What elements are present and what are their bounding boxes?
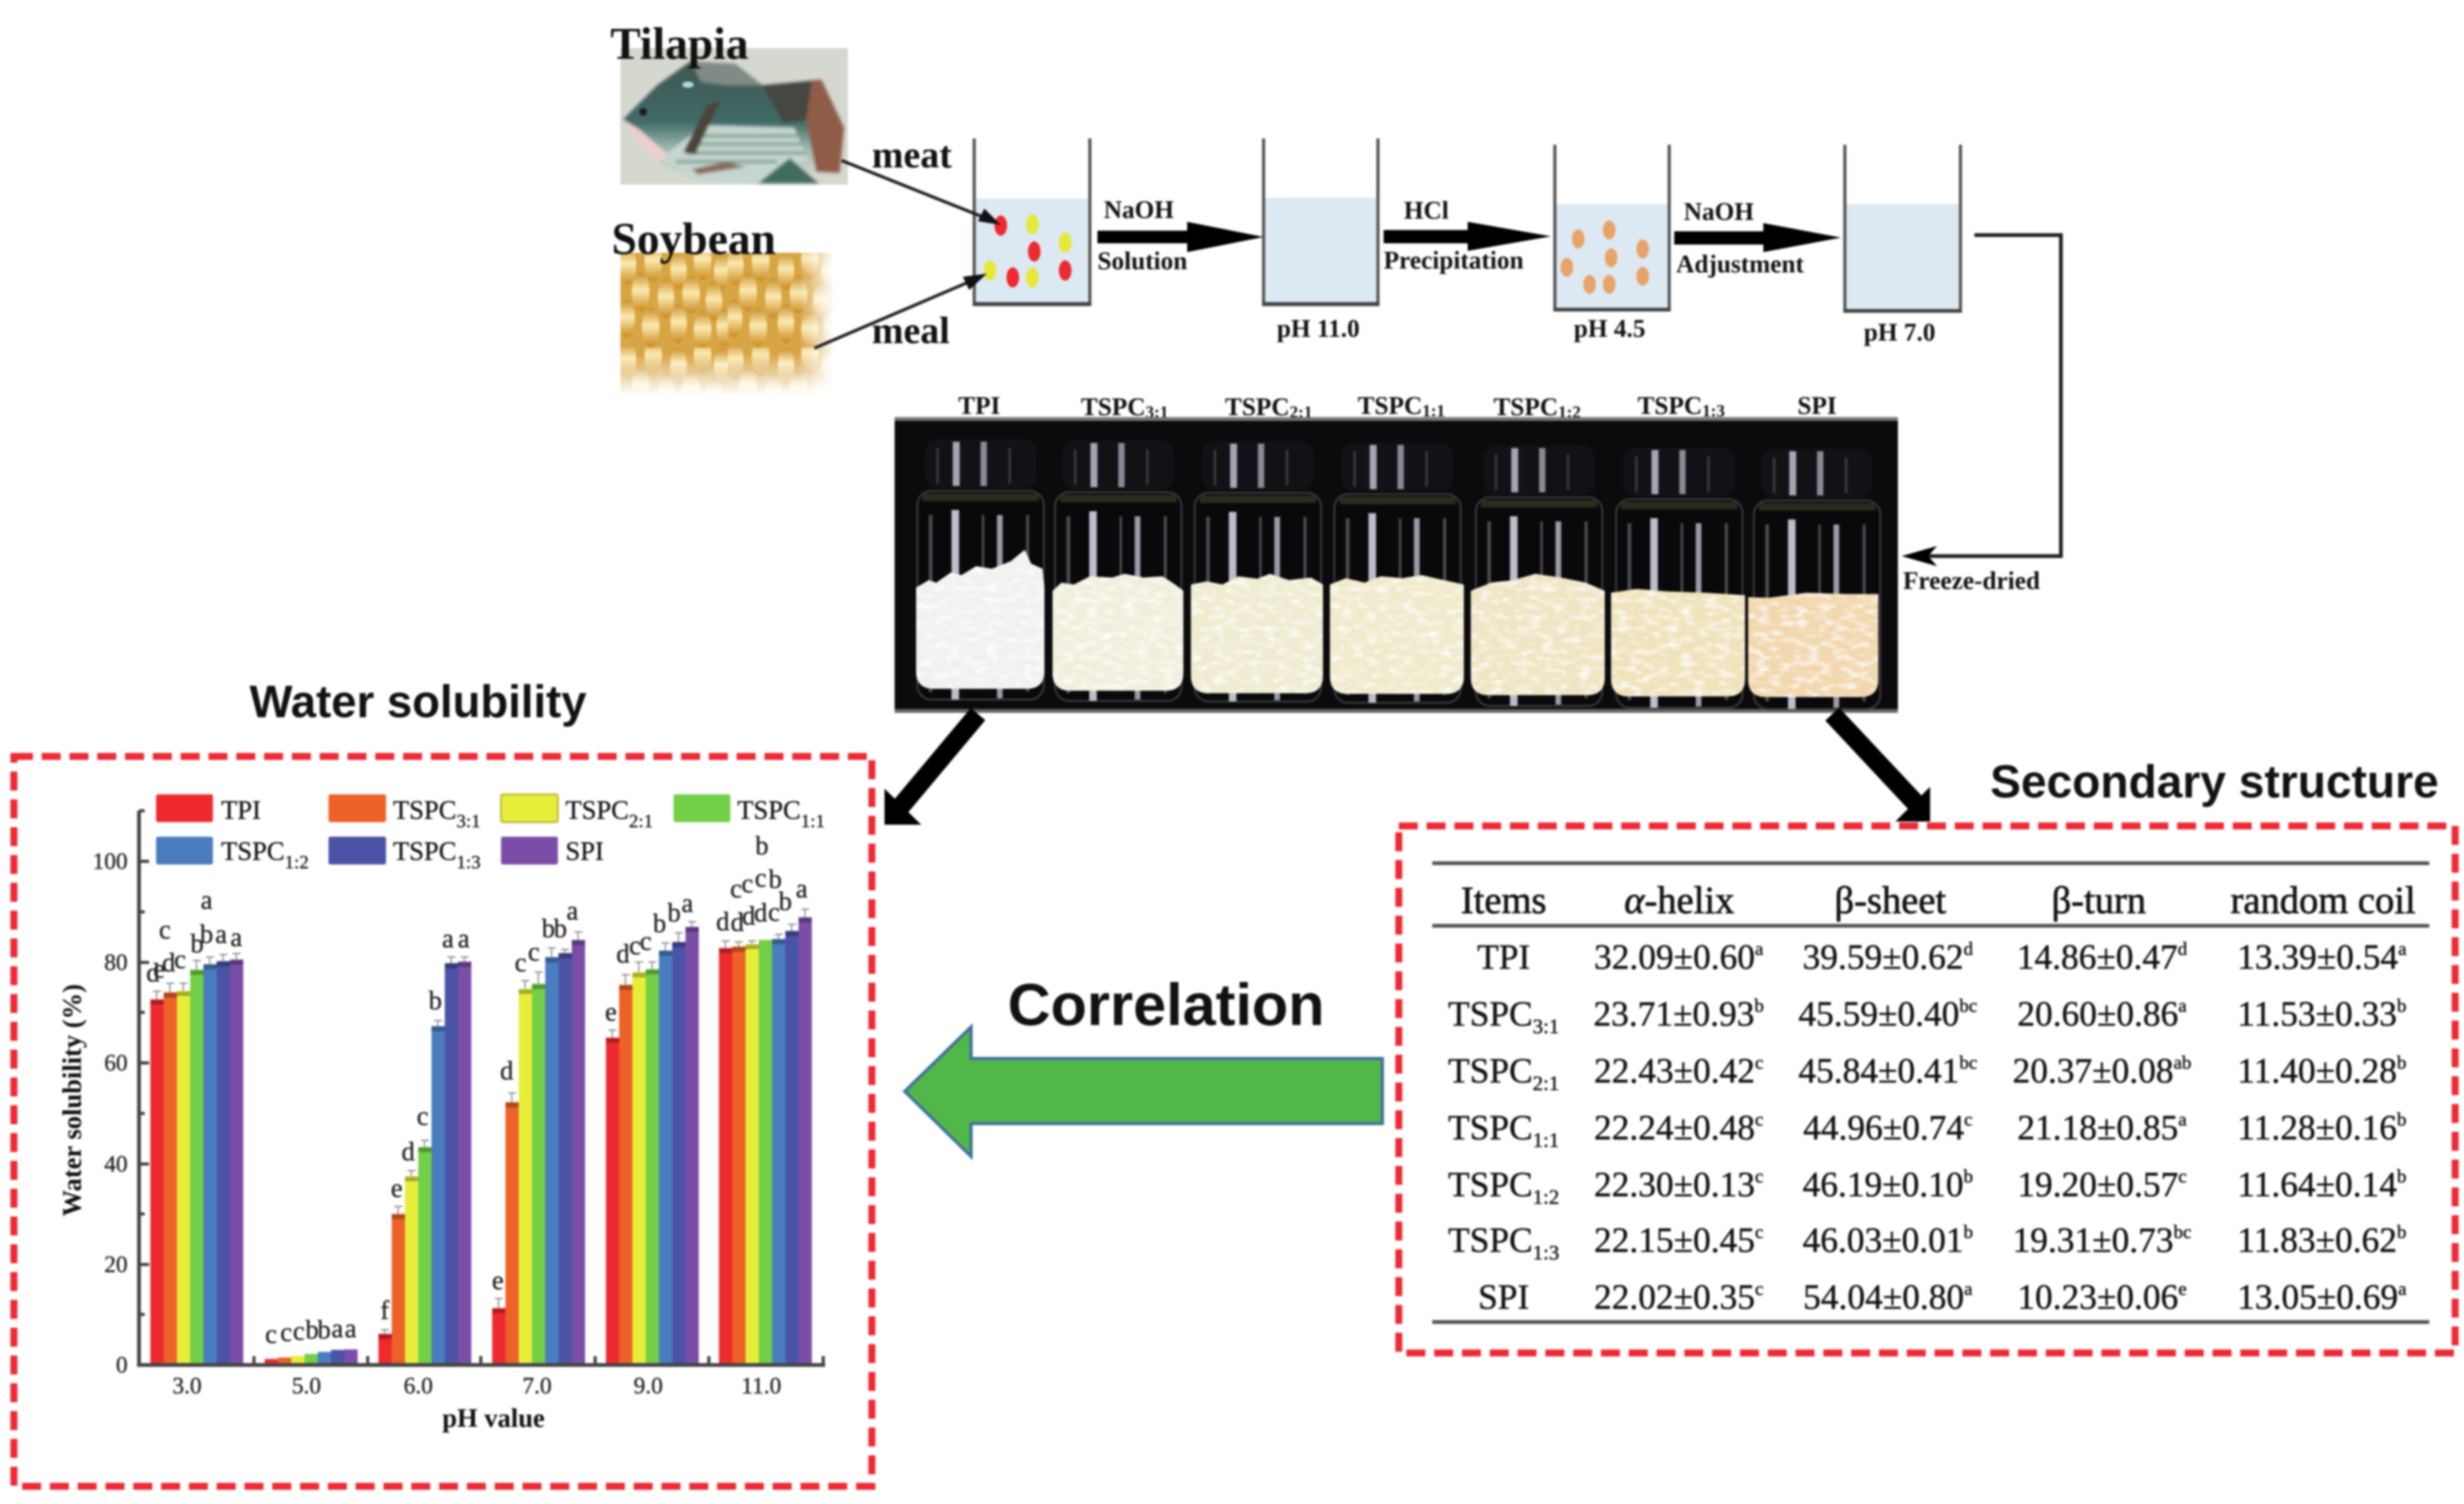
significance letters: c (755, 864, 766, 893)
x axis tick labels: 5.0 (292, 1373, 321, 1399)
table row: SPI: c (1755, 1278, 1763, 1299)
step: NaOH solution arrow: Solution (1097, 246, 1187, 275)
significance letters: b (200, 920, 214, 949)
chart legend: SPI (565, 837, 604, 866)
arrow: meat to beaker (842, 161, 1001, 225)
table row: TSPC 1:3: c (1755, 1222, 1763, 1242)
table row: SPI: 13.05±0.69 (2237, 1278, 2398, 1317)
step: NaOH solution arrow: NaOH (1104, 195, 1174, 224)
table header: β-turn (2051, 880, 2146, 922)
significance letters: a (231, 923, 243, 952)
significance letters: a (682, 889, 694, 918)
step: NaOH solution arrow (1097, 195, 1264, 275)
significance letters: b (542, 914, 555, 943)
beaker 1 with mixture (973, 138, 1091, 306)
x axis tick labels: 6.0 (404, 1373, 433, 1399)
table row: TSPC 1:3: bc (2173, 1222, 2192, 1242)
significance letters: a (442, 925, 454, 954)
significance letters: d (742, 902, 756, 931)
significance letters: b (553, 914, 567, 943)
sample labels above photo: TSPC (1358, 391, 1422, 420)
x axis tick labels: 7.0 (522, 1373, 552, 1399)
significance letters: a (332, 1314, 344, 1343)
table row: TSPC 2:1: c (1755, 1052, 1763, 1073)
chart legend: TSPC (393, 837, 456, 866)
significance letters: b (667, 899, 681, 928)
arrow: photo to secondary structure (1832, 714, 1930, 822)
table row: TSPC 3:1: TSPC (1448, 995, 1533, 1034)
significance letters: a (201, 886, 213, 915)
table row: TPI: d (2178, 938, 2187, 959)
significance letters: b (306, 1316, 318, 1345)
table row: TSPC 1:1: b (2397, 1109, 2407, 1130)
table row: TSPC 1:1 (1448, 1108, 2407, 1152)
table row: TSPC 1:2: 46.19±0.10 (1803, 1165, 1964, 1204)
significance letters: c (515, 949, 526, 978)
table header (1461, 880, 2416, 922)
heading: Tilapia: Tilapia (610, 18, 749, 69)
table row: TSPC 1:2: b (2397, 1166, 2407, 1187)
sample labels above photo: 2:1 (1289, 403, 1312, 421)
image: tilapia fish (620, 48, 848, 185)
table row: TSPC 1:2: 22.30±0.13 (1594, 1165, 1755, 1204)
beaker 2 pH 11.0 (1262, 138, 1379, 343)
table row: TSPC 2:1: TSPC (1448, 1052, 1533, 1091)
significance letters: d (730, 908, 744, 937)
table row: TSPC 3:1: 3:1 (1533, 1016, 1559, 1038)
table row: TSPC 3:1: b (2397, 995, 2407, 1016)
label: meat: meat (872, 134, 952, 176)
x axis tick labels: 9.0 (634, 1373, 663, 1399)
table header: α-helix (1624, 880, 1734, 922)
table row: TSPC 3:1: bc (1959, 995, 1978, 1016)
chart legend (156, 794, 825, 873)
table row: TSPC 2:1: 20.37±0.08 (2012, 1052, 2173, 1091)
table row: TSPC 3:1: 45.59±0.40 (1798, 995, 1959, 1034)
table row: TPI: TPI (1477, 938, 1530, 977)
table row: SPI: a (2398, 1278, 2407, 1299)
significance letters: d (500, 1057, 513, 1086)
significance letters (147, 832, 808, 1349)
beaker 3 pH 4.5 (1554, 145, 1670, 343)
x axis tick labels: 3.0 (172, 1373, 202, 1399)
table row: TSPC 3:1 (1448, 995, 2407, 1038)
significance letters: c (293, 1317, 305, 1346)
significance letters: d (617, 940, 629, 969)
table row: TSPC 1:1: 21.18±0.85 (2017, 1108, 2178, 1148)
chart legend: 1:1 (800, 811, 825, 832)
table row: SPI: a (1964, 1278, 1972, 1299)
table row: TSPC 2:1: 2:1 (1533, 1072, 1559, 1095)
significance letters: c (730, 875, 742, 904)
table row: TPI: 32.09±0.60 (1594, 938, 1755, 977)
table row: TSPC 2:1: ab (2173, 1052, 2192, 1073)
table row: TSPC 2:1: 45.84±0.41 (1798, 1052, 1959, 1091)
table row: TSPC 1:1: c (1964, 1109, 1972, 1130)
significance letters: a (345, 1314, 357, 1343)
significance letters: e (154, 955, 165, 984)
chart axes (139, 811, 825, 1365)
table row: TSPC 1:3: 1:3 (1533, 1242, 1559, 1264)
y axis tick labels: 20 (104, 1252, 128, 1278)
table row: TSPC 1:1: 22.24±0.48 (1594, 1108, 1755, 1148)
step: HCl precipitation arrow: Precipitation (1384, 246, 1523, 274)
image: soybeans (620, 253, 834, 396)
table header: random coil (2230, 880, 2416, 922)
significance letters: b (317, 1316, 331, 1345)
y axis tick labels: 80 (104, 950, 128, 976)
table row: TSPC 1:2: c (1755, 1166, 1763, 1187)
table row: TSPC 1:3: 22.15±0.45 (1594, 1221, 1755, 1260)
y axis tick labels: 60 (104, 1050, 128, 1076)
table row: TSPC 1:2: TSPC (1448, 1165, 1533, 1204)
arrow: meal to beaker (814, 274, 987, 348)
heading: Secondary structure: Secondary structure (1990, 756, 2439, 808)
significance letters: c (159, 916, 171, 945)
significance letters: b (653, 909, 666, 938)
chart legend: TSPC (221, 837, 284, 866)
table row: TSPC 2:1: 11.40±0.28 (2237, 1052, 2397, 1091)
arrow: freeze-dried connector (1902, 235, 2061, 566)
significance letters: d (147, 959, 159, 988)
beaker 2 pH 11.0: pH 11.0 (1277, 314, 1360, 343)
table row: TSPC 3:1: 20.60±0.86 (2017, 995, 2178, 1034)
significance letters: b (191, 930, 203, 959)
table row: TSPC 1:2: 1:2 (1533, 1186, 1559, 1209)
significance letters: a (567, 897, 579, 926)
table row: TSPC 1:1: 11.28±0.16 (2237, 1108, 2397, 1148)
table row: TSPC 2:1: b (2397, 1052, 2407, 1073)
table row: TSPC 3:1: 11.53±0.33 (2237, 995, 2397, 1034)
table row: SPI: SPI (1478, 1278, 1529, 1317)
table row: TSPC 3:1: b (1754, 995, 1764, 1016)
y axis tick labels: 40 (104, 1151, 128, 1177)
table row: TSPC 1:1: c (1755, 1109, 1763, 1130)
table row: TSPC 1:3: 19.31±0.73 (2012, 1221, 2173, 1260)
significance letters: c (174, 945, 186, 974)
table row: TPI: 39.59±0.62 (1803, 938, 1964, 977)
table row: TSPC 1:2: 19.20±0.57 (2017, 1165, 2178, 1204)
significance letters: d (754, 899, 767, 928)
table row: TSPC 1:3: b (2397, 1222, 2407, 1242)
y axis tick labels: 0 (116, 1352, 128, 1378)
significance letters: c (640, 927, 651, 956)
sample labels above photo: 1:2 (1558, 403, 1581, 421)
y axis tick labels: 100 (92, 849, 128, 875)
beaker 4 pH 7.0: pH 7.0 (1864, 318, 1935, 346)
sample labels above photo: 1:1 (1422, 401, 1445, 420)
table row: TSPC 1:1: 44.96±0.74 (1803, 1108, 1964, 1148)
step: HCl precipitation arrow: HCl (1404, 196, 1449, 224)
table row: TSPC 1:3: TSPC (1448, 1221, 1533, 1260)
table row: TSPC 1:2 (1448, 1165, 2407, 1209)
significance letters: a (215, 920, 227, 949)
step: HCl precipitation arrow (1384, 196, 1551, 274)
significance letters: b (756, 832, 768, 861)
sample labels above photo: SPI (1797, 391, 1837, 420)
table row: TSPC 1:1: a (2178, 1109, 2187, 1130)
step: NaOH adjustment arrow: NaOH (1684, 197, 1754, 226)
chart legend: TPI (221, 796, 261, 825)
table row: TSPC 1:1: 1:1 (1533, 1129, 1559, 1152)
sample labels above photo: TSPC (1494, 392, 1558, 421)
significance letters: d (402, 1137, 414, 1167)
table row: TPI: a (2398, 938, 2407, 959)
x axis tick labels: 11.0 (741, 1373, 782, 1399)
table row: SPI: 10.23±0.06 (2017, 1278, 2178, 1317)
table header: β-sheet (1835, 880, 1946, 922)
table row: TSPC 2:1: bc (1959, 1052, 1978, 1073)
y axis tick labels (92, 849, 128, 1378)
significance letters: a (458, 925, 470, 954)
table header: Items (1461, 880, 1547, 922)
y axis title: Water solubility (%) (58, 984, 87, 1216)
chart legend: 1:3 (456, 852, 481, 873)
beaker 4 pH 7.0 (1844, 145, 1962, 346)
table row: TSPC 1:3: 46.03±0.01 (1803, 1221, 1964, 1260)
significance letters: b (768, 865, 782, 894)
table row: TSPC 1:2: b (1964, 1166, 1973, 1187)
sample labels above photo: 3:1 (1145, 403, 1168, 421)
significance letters: c (265, 1320, 277, 1349)
table row: TSPC 1:2: c (2178, 1166, 2187, 1187)
step: NaOH adjustment arrow (1674, 197, 1841, 278)
photo: seven powder vials (895, 417, 1898, 713)
table row: TSPC 2:1: 22.43±0.42 (1594, 1052, 1755, 1091)
significance letters: c (281, 1318, 292, 1347)
significance letters: b (778, 887, 792, 916)
sample labels above photo: TSPC (1638, 391, 1702, 420)
table row: TSPC 1:2: 11.64±0.14 (2237, 1165, 2397, 1204)
sample labels above photo: TPI (958, 391, 1000, 420)
significance letters: d (162, 949, 176, 978)
sample labels above photo: 1:3 (1702, 401, 1725, 420)
table row: TPI: d (1964, 938, 1973, 959)
table row: SPI: e (2178, 1278, 2187, 1299)
table row: TSPC 1:1: TSPC (1448, 1108, 1533, 1148)
label: Freeze-dried: Freeze-dried (1903, 566, 2040, 595)
table rules (1432, 863, 2429, 1322)
significance letters: a (796, 875, 808, 904)
table row: TPI: a (1755, 938, 1763, 959)
significance letters: c (742, 870, 753, 899)
significance letters: e (492, 1266, 504, 1295)
chart legend: TSPC (565, 796, 629, 825)
heading: Soybean: Soybean (612, 214, 776, 264)
table row: TSPC 2:1 (1448, 1052, 2407, 1095)
panel: water solubility chart (14, 756, 872, 1486)
table row: TSPC 3:1: a (2178, 995, 2187, 1016)
x axis title: pH value (442, 1404, 545, 1433)
chart legend: 3:1 (456, 811, 481, 832)
arrow: correlation green (905, 1027, 1382, 1156)
table row: TPI (1477, 938, 2407, 977)
x axis tick labels (172, 1373, 782, 1399)
significance letters: c (629, 931, 641, 961)
chart legend: TSPC (737, 796, 800, 825)
table row: TPI: 13.39±0.54 (2237, 938, 2398, 977)
chart legend: 1:2 (284, 852, 309, 873)
significance letters: c (417, 1102, 428, 1131)
panel: secondary structure table (1399, 826, 2455, 1353)
significance letters: f (380, 1296, 389, 1325)
table row: TSPC 1:3 (1448, 1221, 2407, 1264)
arrow: photo to water solubility (885, 714, 978, 825)
significance letters: c (528, 938, 540, 967)
significance letters: e (391, 1174, 402, 1203)
table row: TSPC 3:1: 23.71±0.93 (1593, 995, 1754, 1034)
table row: TSPC 1:3: 11.83±0.62 (2237, 1221, 2397, 1260)
sample labels above photo: TSPC (1225, 392, 1289, 421)
chart legend: TSPC (393, 796, 456, 825)
heading: Water solubility: Water solubility (250, 677, 586, 727)
table row: SPI: 54.04±0.80 (1803, 1278, 1964, 1317)
sample labels above photo: TSPC (1081, 392, 1145, 421)
sample labels above photo (958, 391, 1837, 421)
table row: TSPC 1:3: b (1964, 1222, 1973, 1242)
significance letters: e (605, 998, 617, 1027)
step: NaOH adjustment arrow: Adjustment (1676, 250, 1804, 278)
table row: SPI: 22.02±0.35 (1594, 1278, 1755, 1317)
table row: SPI (1478, 1278, 2407, 1317)
label: meal: meal (872, 310, 950, 351)
table row: TPI: 14.86±0.47 (2017, 938, 2178, 977)
heading: Correlation: Correlation (1008, 971, 1324, 1038)
chart legend: 2:1 (629, 811, 653, 832)
significance letters: c (768, 898, 780, 927)
significance letters: d (716, 907, 729, 937)
bars (150, 909, 812, 1365)
beaker 3 pH 4.5: pH 4.5 (1574, 314, 1645, 343)
significance letters: b (428, 986, 442, 1016)
